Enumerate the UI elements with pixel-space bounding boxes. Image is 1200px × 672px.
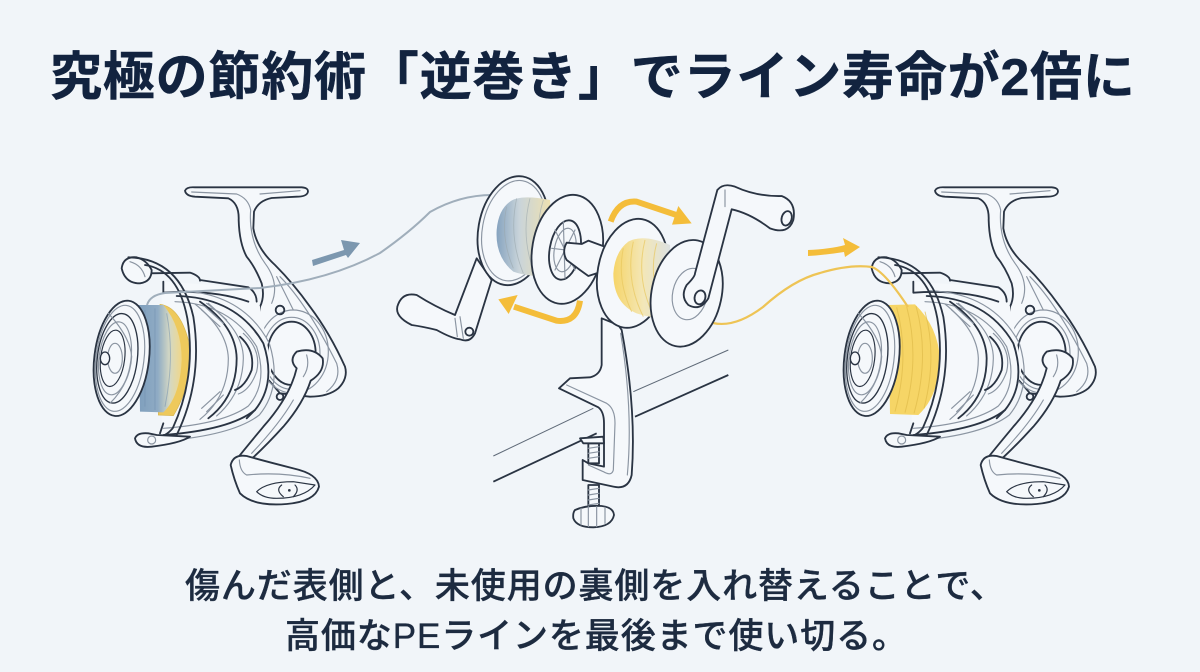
table bar bbox=[493, 350, 728, 482]
arrow: yellow top bbox=[611, 202, 692, 225]
worn line on left spool bbox=[138, 304, 189, 416]
caption line 2: 高価なPEラインを最後まで使い切る。 bbox=[285, 617, 908, 656]
right crank bbox=[684, 185, 794, 307]
source spool bbox=[469, 170, 611, 310]
blue line leaving left reel bbox=[147, 195, 492, 305]
rewinder: spools on clamp bbox=[397, 170, 794, 527]
axle bbox=[564, 241, 607, 276]
arrow: yellow to right reel bbox=[808, 238, 860, 257]
left crank bbox=[397, 258, 492, 340]
reel: left, partly blue line bbox=[87, 187, 346, 504]
reel: right, fresh yellow line bbox=[837, 187, 1096, 504]
arrow: yellow bottom bbox=[498, 295, 580, 321]
clamp bbox=[559, 318, 633, 527]
yellow line on right spool bbox=[888, 304, 940, 415]
title: 究極の節約術「逆巻き」でライン寿命が2倍に bbox=[50, 49, 1136, 107]
clamp screw bbox=[573, 437, 614, 527]
destination spool bbox=[589, 213, 732, 353]
handle tip and pivot details bbox=[693, 190, 793, 305]
caption line 1: 傷んだ表側と、未使用の裏側を入れ替えることで、 bbox=[185, 567, 1006, 606]
arrow: blue bbox=[312, 240, 360, 266]
yellow line entering right reel bbox=[713, 266, 908, 324]
